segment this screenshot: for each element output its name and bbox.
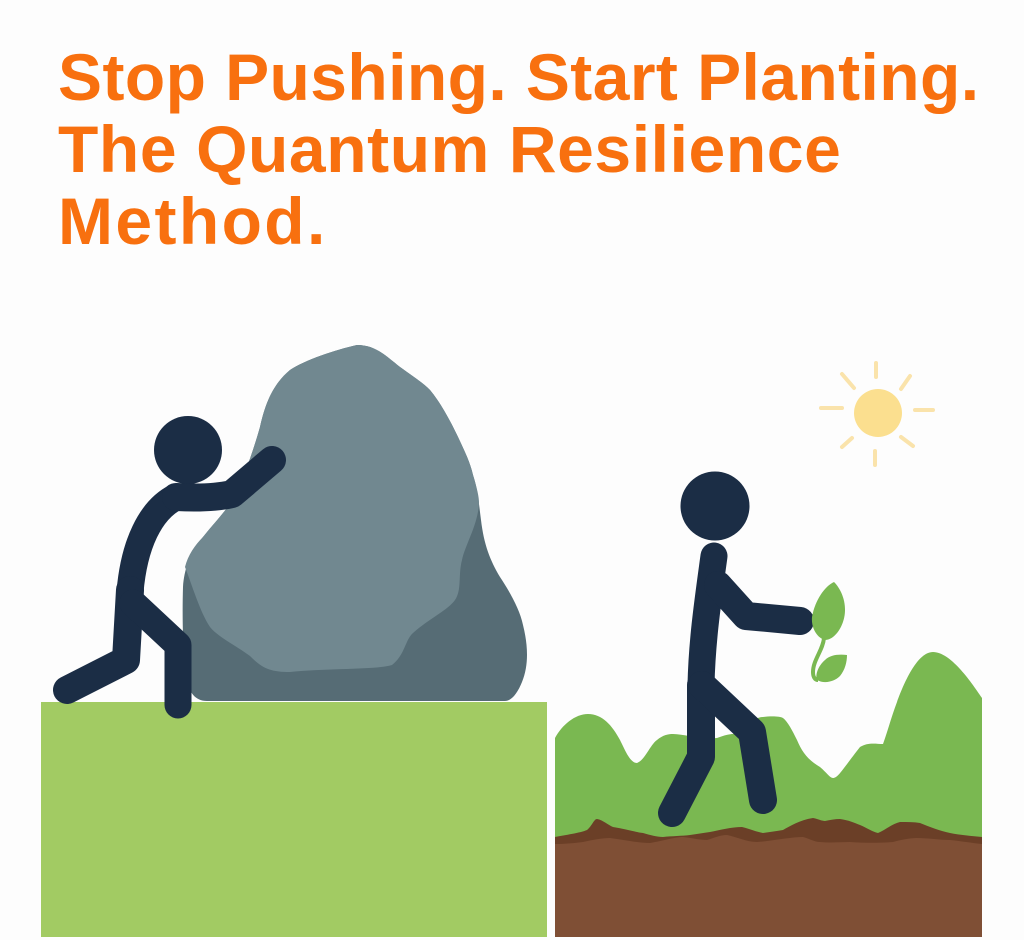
back leg [672,685,701,813]
head [680,472,750,540]
title: Method. [58,184,328,258]
figure: man pushing [67,416,272,705]
title [58,40,980,258]
front leg [702,685,763,800]
torso [130,497,176,592]
panel: right soil [555,818,982,937]
title: The Quantum Resilience [58,112,841,186]
arm [718,585,800,621]
arm [176,460,272,498]
panel: right hills [555,652,982,840]
panel: left green block [41,702,547,937]
head [154,416,222,484]
figure: man planting [672,472,800,813]
icon: boulder [183,345,527,701]
torso [701,556,714,685]
icon: sun [821,363,933,465]
icon: sprout [812,582,847,682]
back leg [67,590,130,690]
title: Stop Pushing. Start Planting. [58,40,980,114]
front leg [133,603,178,705]
